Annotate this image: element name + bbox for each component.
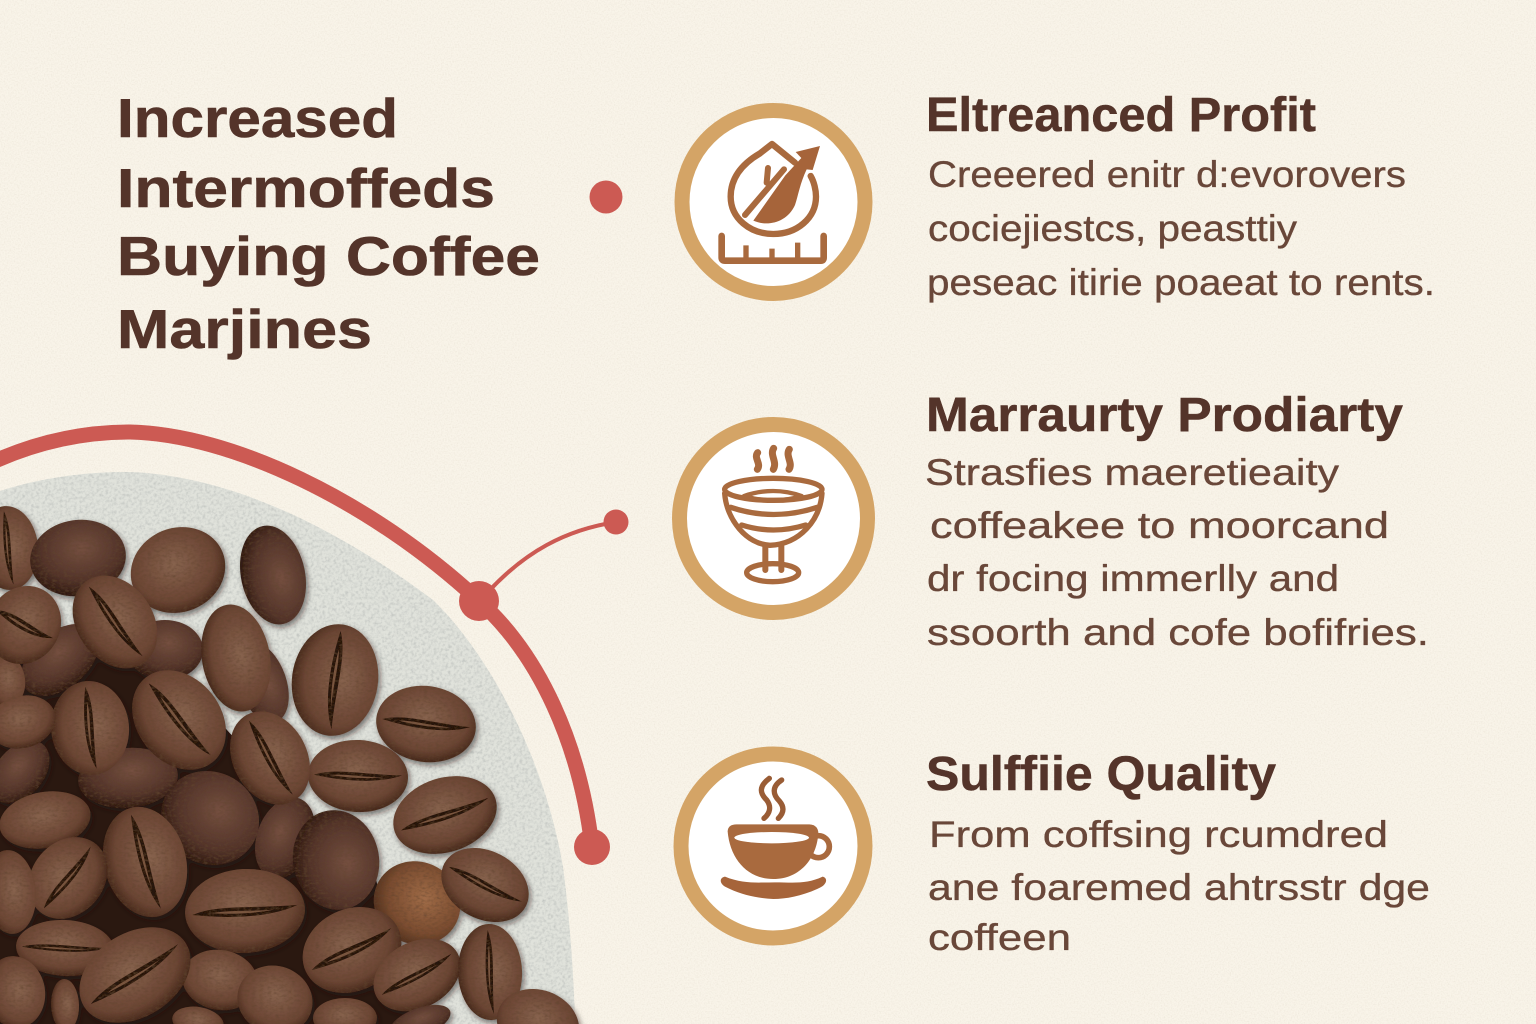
body text xyxy=(928,814,1430,958)
dot marker xyxy=(590,180,622,214)
dark gaps between beans xyxy=(0,600,440,1024)
body text: Strasfies maeretieaity xyxy=(925,452,1340,493)
coffee beans xyxy=(0,504,589,1024)
icon: leaf arrow and ruler xyxy=(682,110,865,294)
body text: ane foaremed ahtrsstr dge xyxy=(928,867,1430,908)
heading: Eltreanced Profit xyxy=(926,89,1316,142)
red arc timeline xyxy=(0,432,610,865)
plate with coffee beans xyxy=(0,472,589,1024)
panel: enhanced profit xyxy=(682,89,1435,303)
body text: peseac itirie poaeat to rents. xyxy=(927,262,1435,303)
body text: coffeen xyxy=(928,917,1071,958)
body text: Creeered enitr d:evorovers xyxy=(928,154,1406,195)
body text: cociejiestcs, peasttiy xyxy=(928,208,1298,249)
panel: sulffiie quality xyxy=(681,748,1430,958)
connector to second icon xyxy=(488,510,628,592)
title xyxy=(117,87,540,360)
panel: marraurty prodiarty xyxy=(680,389,1429,653)
title: Buying Coffee xyxy=(117,225,540,287)
body text: ssoorth and cofe bofifries. xyxy=(927,612,1429,653)
body text xyxy=(927,154,1435,303)
icon: steaming goblet xyxy=(680,424,868,612)
body text: From coffsing rcumdred xyxy=(929,814,1388,855)
body text: dr focing immerlly and xyxy=(927,558,1339,599)
body text: coffeakee to moorcand xyxy=(930,505,1389,546)
title: Marjines xyxy=(117,298,372,360)
title: Intermoffeds xyxy=(117,157,495,219)
plate xyxy=(0,472,575,1024)
icon: coffee cup xyxy=(681,754,865,938)
body text xyxy=(925,452,1429,653)
heading: Sulffiie Quality xyxy=(926,748,1276,801)
title: Increased xyxy=(117,87,398,149)
heading: Marraurty Prodiarty xyxy=(926,389,1403,442)
